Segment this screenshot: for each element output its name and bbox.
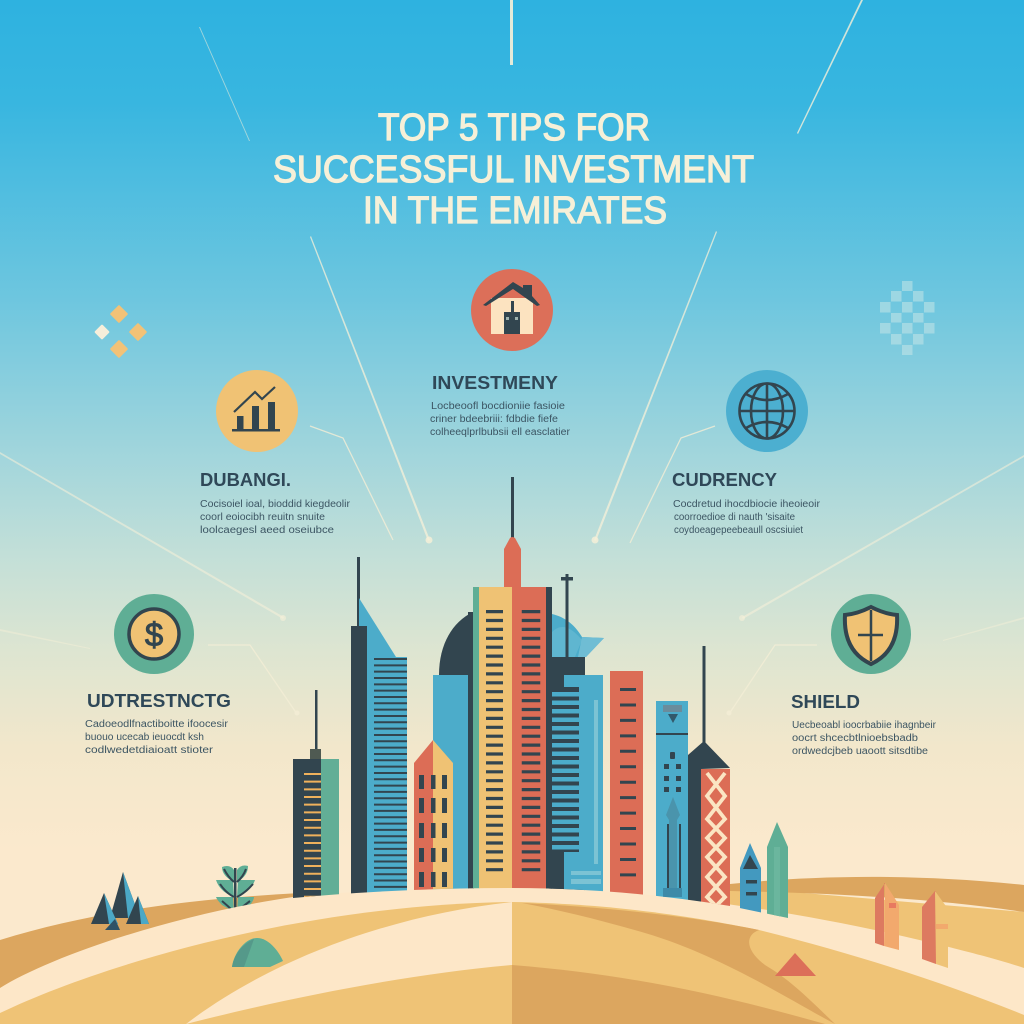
title: SUCCESSFUL INVESTMENT (273, 149, 754, 191)
icon: orange tower two (922, 891, 948, 968)
building: right central tower (546, 574, 604, 897)
icon: pyramids (91, 872, 149, 930)
heading: udtrestnctg: UDTRESTNCTG (87, 690, 231, 711)
building: tall blue tower (351, 557, 407, 901)
text block: dubangi: Cocisoiel ioal, bioddid kiegdeolir (200, 499, 351, 510)
building: small left tower (293, 690, 339, 904)
building: blue patterned tower (656, 701, 688, 916)
text block: dubangi: coorl eoiocibh reuitn snuite (200, 512, 325, 523)
panel: udtrestnctg (85, 594, 231, 756)
icon: dollar coin (114, 594, 194, 674)
text block: udtrestnctg (85, 719, 229, 756)
text block: cudrency: coorroedioe di nauth 'sisaite (674, 512, 795, 523)
icon: house (471, 269, 553, 351)
text block: investmeny: criner bdeebriii: fdbdie fiefe (430, 414, 558, 425)
building: dome and blue block (433, 612, 474, 895)
panel: dubangi (200, 370, 351, 536)
text block: shield: ordwedcjbeb uaoott sitsdtibe (792, 746, 928, 757)
text block: shield (792, 720, 937, 757)
text block: investmeny (430, 401, 571, 438)
panel: investmeny (430, 269, 571, 438)
title: TOP 5 TIPS FOR (378, 107, 650, 149)
icon: green mound (232, 938, 283, 967)
text block: cudrency: Cocdretud ihocdbiocie iheoieoir (673, 499, 821, 510)
building: red tower (610, 671, 643, 911)
building: central tower (473, 477, 552, 897)
heading: dubangi: DUBANGI. (200, 469, 291, 490)
skyline (293, 477, 788, 920)
back dunes (0, 877, 1024, 1000)
icon: orange tower one (875, 883, 899, 950)
title (273, 107, 754, 232)
heading: shield: SHIELD (791, 691, 860, 712)
light rays (0, 0, 1024, 649)
icon: globe (726, 370, 808, 452)
text block: dubangi: loolcaegesl aeed oseiubce (200, 525, 334, 536)
panel: shield (791, 594, 937, 757)
heading: cudrency: CUDRENCY (672, 469, 778, 490)
icon: shield (831, 594, 911, 674)
title: IN THE EMIRATES (363, 190, 667, 232)
text block: cudrency: coydoeagepeebeaull oscsiuiet (674, 525, 803, 536)
icon: bar chart (216, 370, 298, 452)
text block: udtrestnctg: Cadoeodlfnactiboitte ifoocesir (85, 719, 229, 730)
icon: red triangle (775, 953, 816, 976)
icon: plant (216, 866, 255, 913)
building: small gabled block (414, 740, 453, 897)
text block: dubangi (200, 499, 351, 536)
heading: investmeny: INVESTMENY (432, 372, 559, 393)
connector lines (208, 426, 817, 716)
decorative diamonds (94, 305, 147, 358)
text block: udtrestnctg: buouo ucecab ieuocdt ksh (85, 732, 204, 743)
building: small green tower (767, 822, 788, 920)
text block: shield: oocrt shcecbtlnioebsbadb (792, 733, 918, 744)
text block: investmeny: colheeqlprlbubsii ell easclatier (430, 427, 571, 438)
building: dark and red lattice tower (688, 646, 730, 920)
text block: cudrency (673, 499, 821, 536)
foreground hill (0, 888, 1024, 1024)
icon: dollar coin: $ (145, 616, 163, 653)
text block: udtrestnctg: codlwedetdiaioatt stioter (85, 745, 214, 756)
text block: shield: Uecbeoabl ioocrbabiie ihagnbeir (792, 720, 937, 731)
text block: investmeny: Locbeoofl bocdioniie fasioie (431, 401, 565, 412)
building: small blue tower (740, 843, 761, 920)
decorative pixel pattern (880, 281, 934, 355)
panel: cudrency (672, 370, 821, 536)
